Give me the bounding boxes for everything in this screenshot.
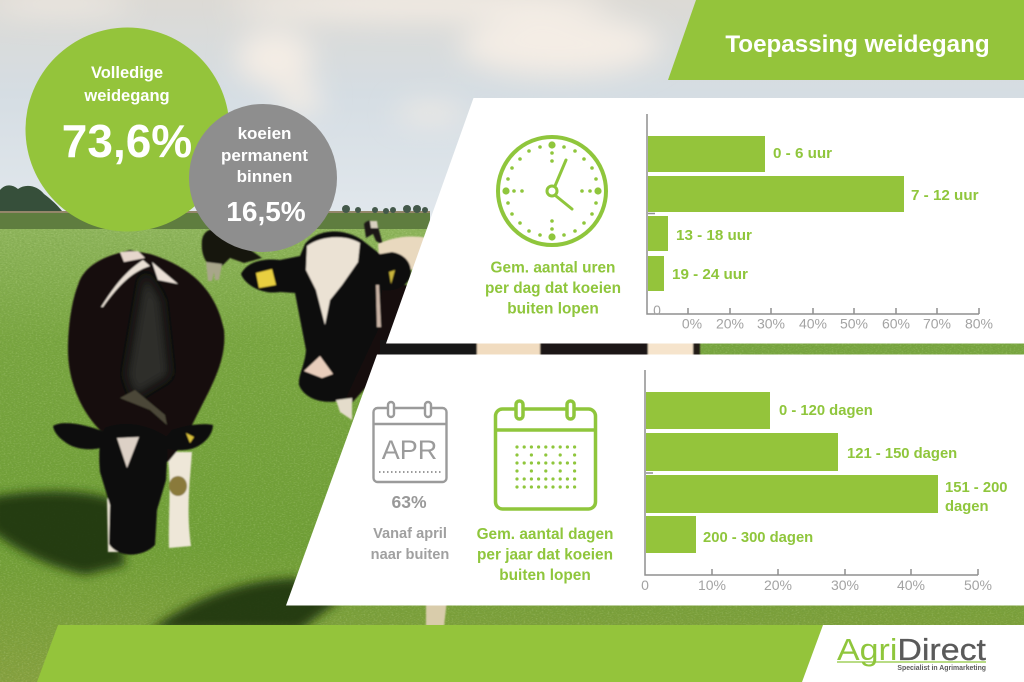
bar chart: dagen per jaar: 50% — [964, 577, 992, 593]
circle: koeien permanent binnen: permanent — [221, 146, 308, 165]
shadows on the grass — [0, 491, 340, 630]
looking cow — [241, 231, 700, 626]
bar chart: dagen per jaar: 0 - 120 dagen — [779, 403, 873, 419]
bar chart: dagen per jaar — [641, 370, 1008, 593]
bar chart: dagen per jaar: 121 - 150 dagen — [847, 446, 957, 462]
april caption: naar buiten — [371, 547, 449, 563]
bar chart: dagen per jaar: dagen — [945, 499, 989, 515]
circle: koeien permanent binnen: 16,5% — [226, 196, 306, 227]
april percentage: 63% — [391, 492, 427, 512]
bar chart: dagen per jaar: 10% — [698, 577, 726, 593]
bar chart: uren per dag: 60% — [882, 316, 910, 332]
bar chart: uren per dag: 0 - 6 uur — [773, 145, 832, 162]
bar chart: uren per dag: 13 - 18 uur — [676, 227, 752, 244]
hedge and tree line — [0, 185, 430, 229]
grazing cow — [53, 250, 224, 555]
icon: april calendar — [373, 402, 447, 482]
circle: volledige weidegang — [26, 28, 230, 232]
panel: dagen per jaar — [286, 354, 1024, 606]
background cows — [202, 221, 383, 281]
bar chart: uren per dag: 70% — [923, 316, 951, 332]
bar chart: dagen per jaar: 40% — [897, 577, 925, 593]
panel: uren per dag — [386, 98, 1024, 344]
bar chart: uren per dag: 80% — [965, 316, 993, 332]
bar chart: dagen per jaar: 30% — [831, 577, 859, 593]
bar chart: uren per dag: 0 — [653, 302, 661, 318]
bar chart: uren per dag: 40% — [799, 316, 827, 332]
circle: volledige weidegang: weidegang — [83, 87, 170, 105]
clock caption: Gem. aantal uren — [491, 260, 615, 276]
bar chart: uren per dag: 7 - 12 uur — [911, 187, 979, 204]
bar chart: uren per dag: 50% — [840, 316, 868, 332]
icon: clock — [498, 137, 606, 245]
circle: koeien permanent binnen: binnen — [237, 167, 292, 186]
icon: april calendar: APR — [382, 435, 437, 465]
bar chart: dagen per jaar: 20% — [764, 577, 792, 593]
icon: green calendar — [495, 401, 596, 509]
clock caption: per dag dat koeien — [485, 280, 621, 297]
circle: volledige weidegang: 73,6% — [62, 115, 192, 167]
bar chart: uren per dag — [647, 114, 993, 332]
circle: koeien permanent binnen — [189, 104, 337, 252]
green calendar caption: buiten lopen — [499, 567, 591, 584]
bar chart: dagen per jaar: 0 — [641, 577, 649, 593]
logo: AgriDirect: AgriDirect — [837, 632, 986, 667]
bar chart: uren per dag: 30% — [757, 316, 785, 332]
circle: volledige weidegang: Volledige — [91, 64, 163, 82]
bar chart: uren per dag: 0% — [682, 316, 702, 332]
circle: koeien permanent binnen: koeien — [238, 124, 291, 143]
bar chart: dagen per jaar: 200 - 300 dagen — [703, 530, 813, 546]
footer banner — [37, 625, 1024, 682]
bar chart: uren per dag: 19 - 24 uur — [672, 266, 748, 283]
bar chart: uren per dag: 20% — [716, 316, 744, 332]
green calendar caption: per jaar dat koeien — [477, 546, 613, 564]
bar chart: dagen per jaar: 151 - 200 — [945, 480, 1008, 496]
title: Toepassing weidegang — [725, 31, 990, 58]
green calendar caption: Gem. aantal dagen — [477, 526, 613, 543]
clock caption: buiten lopen — [507, 300, 599, 318]
april caption: Vanaf april — [373, 526, 447, 542]
header banner — [668, 0, 1024, 80]
logo: AgriDirect: Specialist in Agrimarketing — [897, 665, 986, 672]
